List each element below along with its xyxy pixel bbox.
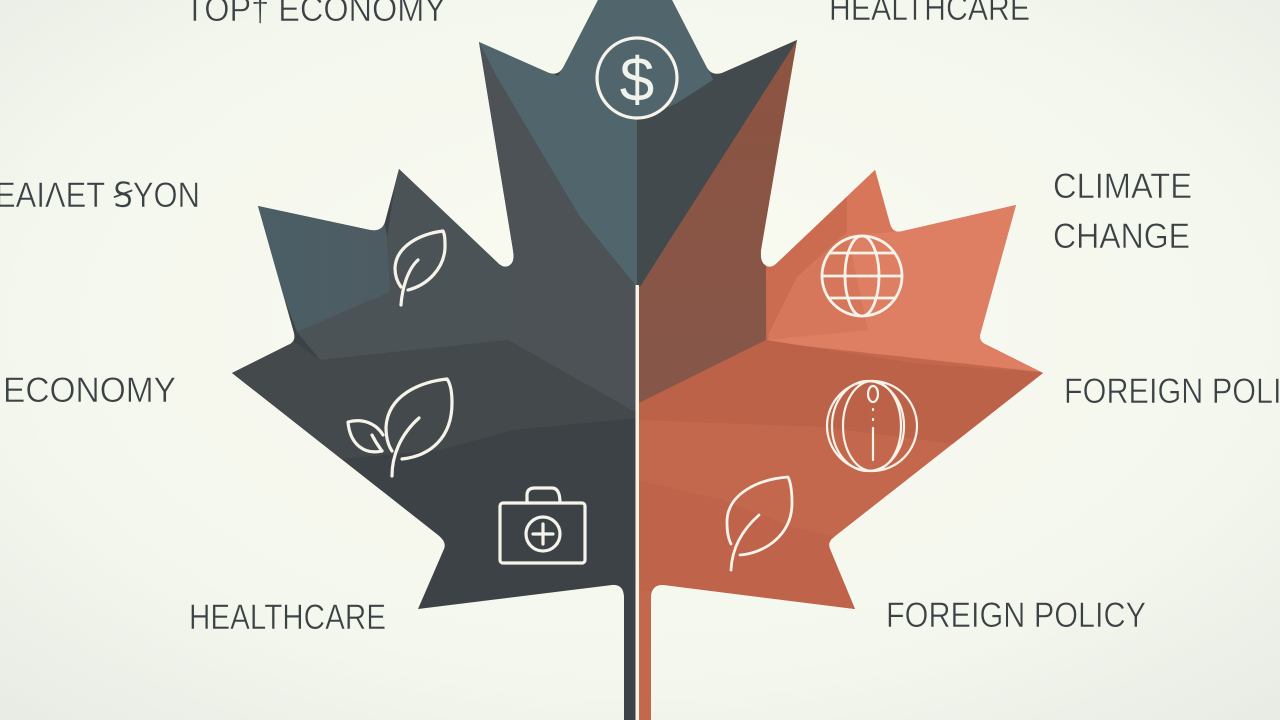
icon: leaf lower right [727, 477, 792, 570]
maple leaf: left dark half [220, 0, 638, 720]
icon: info globe [827, 381, 917, 471]
centre vein [636, 285, 639, 720]
icon: dollar coin [597, 38, 677, 118]
icon: dollar coin: $ [620, 46, 654, 115]
label: climate change [1053, 167, 1192, 256]
label: economy: ECONOMY [3, 371, 176, 410]
maple leaf: right orange half [637, 0, 1057, 720]
icon: sprout [348, 379, 452, 476]
label: climate change: CHANGE [1053, 217, 1190, 256]
icon: medical kit [500, 488, 585, 563]
label: climate change: CLIMATE [1053, 167, 1192, 206]
label: foreign policy bottom: FOREIGN POLICY [886, 596, 1146, 635]
icon: globe [822, 236, 902, 316]
label: bottom healthcare: HEALTHCARE [189, 598, 386, 637]
icon: leaf upper left [395, 231, 445, 305]
label: garbled cabinet text: EAIΛET ꞨYON [0, 176, 200, 215]
